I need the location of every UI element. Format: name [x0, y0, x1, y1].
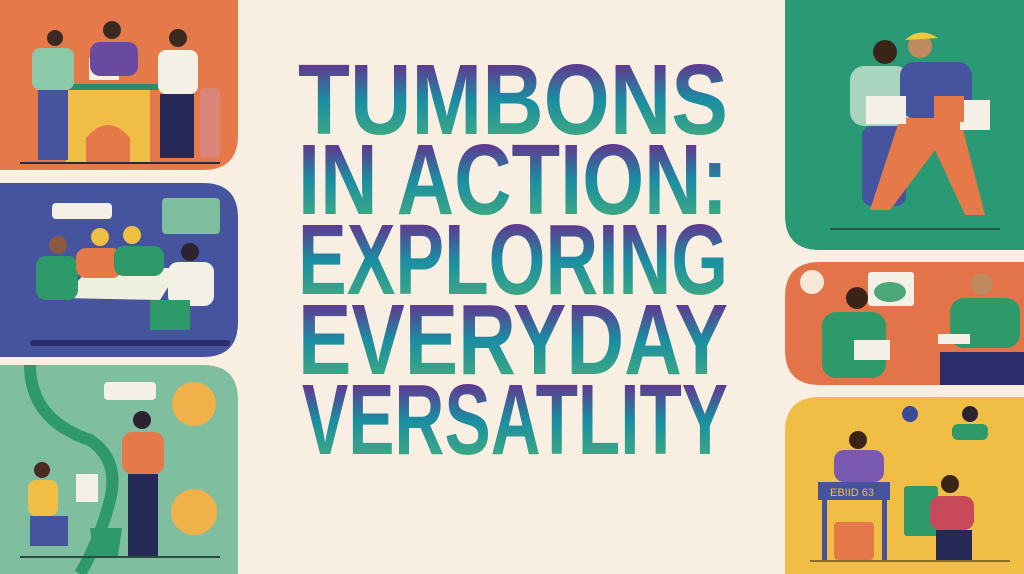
panel: blue middle-left: [0, 183, 238, 357]
panel: yellow bottom-right: [785, 397, 1024, 574]
title: EVERYDAY: [298, 284, 728, 396]
illustration: two people discussing a map: [800, 270, 1024, 385]
illustration: stand with people: [810, 406, 1010, 562]
panel: green top-right: [785, 0, 1024, 250]
panel: orange middle-right: [785, 262, 1024, 385]
illustration: handing a document: [20, 365, 220, 574]
title: TUMBONS: [298, 44, 728, 156]
illustration: two people walking: [830, 32, 1000, 230]
stand label: EBIID 63: [830, 487, 874, 499]
title: IN ACTION:: [298, 124, 728, 236]
panel: orange top-left: [0, 0, 238, 170]
title: EXPLORING: [298, 204, 728, 316]
title: VERSATLITY: [302, 364, 728, 476]
illustration: group at table: [30, 198, 230, 346]
title: [298, 44, 728, 476]
illustration: people at desk: [20, 21, 220, 164]
panel: green bottom-left: [0, 365, 238, 574]
